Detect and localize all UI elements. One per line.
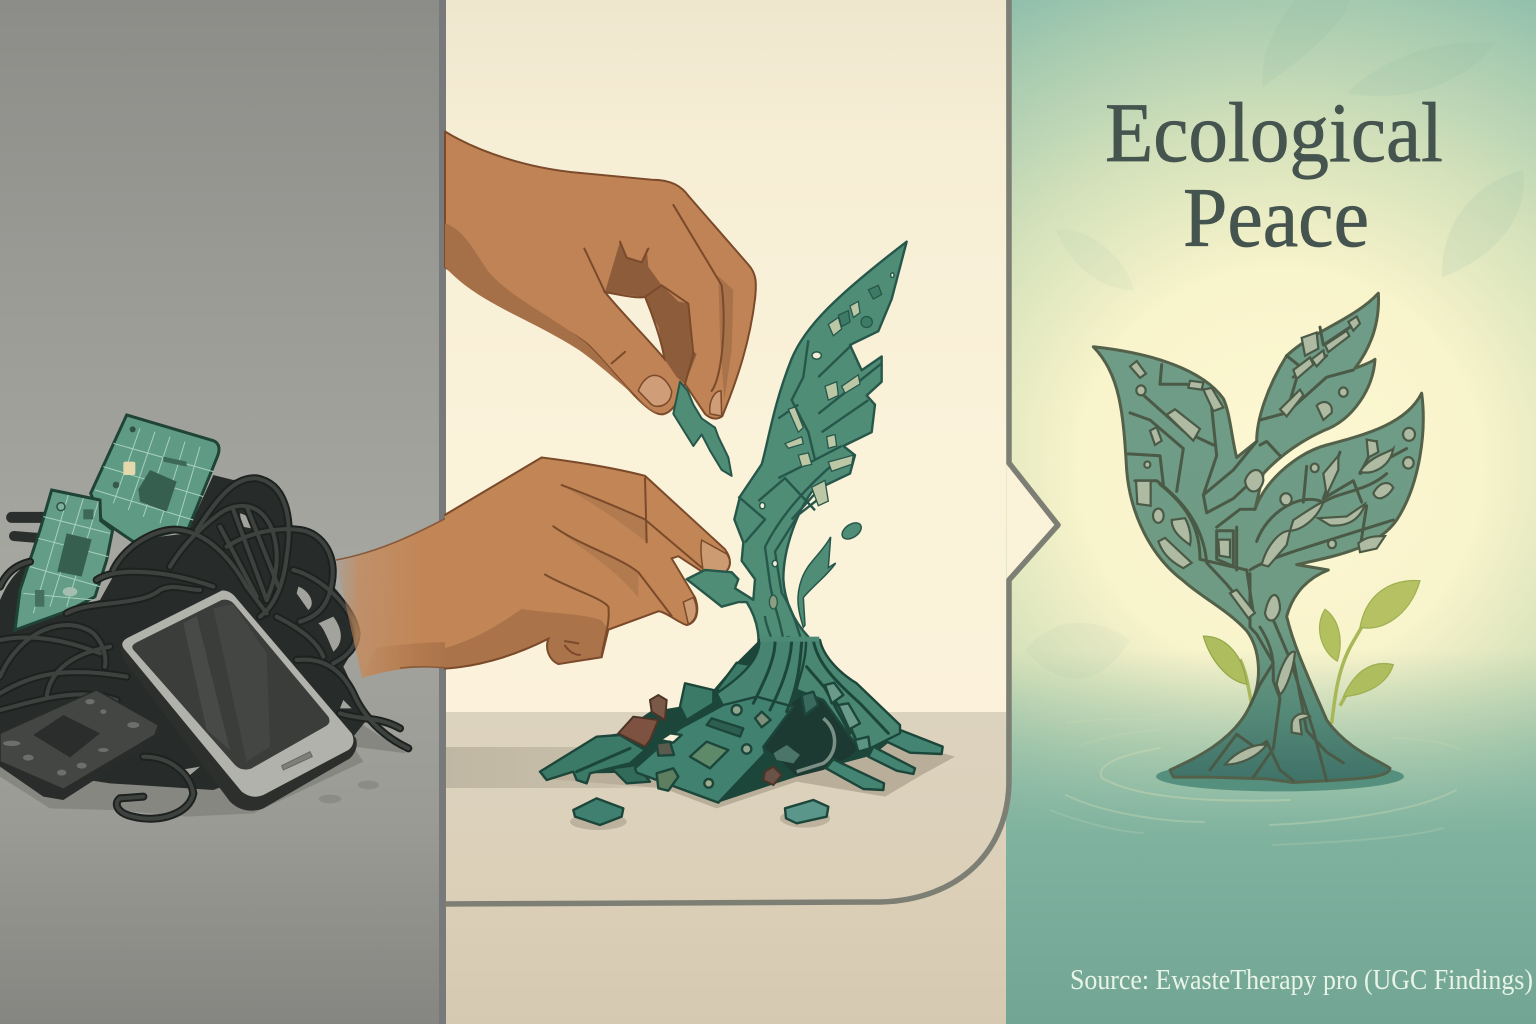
panel: e-waste (left): [0, 0, 442, 1024]
faint leaves: [1025, 0, 1524, 679]
seedling base: roots, board and rubble: [540, 637, 955, 830]
small chips: [573, 798, 828, 825]
shadow on table: [540, 740, 955, 808]
sprouts: [1203, 581, 1420, 724]
plugs: [12, 517, 43, 538]
title: Peace: [1183, 171, 1369, 265]
arm crossing into the left panel: [336, 515, 452, 678]
title: Ecological: [1105, 86, 1443, 180]
smartphone: [121, 591, 357, 811]
dark cave under trunk: [763, 683, 867, 777]
cable mass behind: [0, 475, 367, 790]
fallen board: [635, 697, 793, 803]
loose fragments: [798, 520, 863, 627]
circuit board back: [91, 415, 219, 542]
water ripples: [1050, 719, 1460, 845]
illustration: hands and circuit seedling: [445, 131, 907, 669]
upper hand: [445, 131, 756, 419]
rear blocks: [680, 683, 713, 720]
left roots: [540, 735, 645, 783]
title: [1105, 86, 1443, 265]
chip board: [0, 690, 159, 800]
trunk left strands: [717, 640, 806, 720]
circuit traces: [738, 340, 882, 653]
tree silhouette: [1093, 293, 1423, 782]
small chips shadow: [570, 809, 830, 830]
backing silhouette: [540, 640, 900, 803]
gaps in cables: [180, 513, 352, 775]
panel: repair (middle): [442, 0, 1008, 1024]
divider: panel outline with arrow notch: [445, 0, 1058, 904]
illustration: e-waste pile: [0, 415, 408, 819]
spill marks: [319, 781, 379, 803]
circuit seedling wing and trunk: [687, 242, 907, 655]
trunk right strands: [797, 640, 900, 752]
rocks: [618, 695, 782, 785]
mosaic seams: [1128, 316, 1415, 781]
circuit board front: [15, 490, 113, 630]
divider: left panel edge: [439, 0, 446, 1024]
tangled cables: [0, 478, 408, 819]
trunk join patch: [760, 637, 819, 642]
illustration: circuit tree: [1093, 293, 1423, 791]
picked component: upper: [673, 382, 732, 476]
panel: ecological peace (right): [1006, 0, 1536, 1024]
cave details: [773, 718, 835, 772]
right root fingers: [826, 723, 943, 790]
ground shadow: [0, 710, 407, 817]
lower hand: [445, 457, 730, 669]
tree shadow: [1156, 761, 1404, 791]
board parts: [657, 705, 771, 791]
